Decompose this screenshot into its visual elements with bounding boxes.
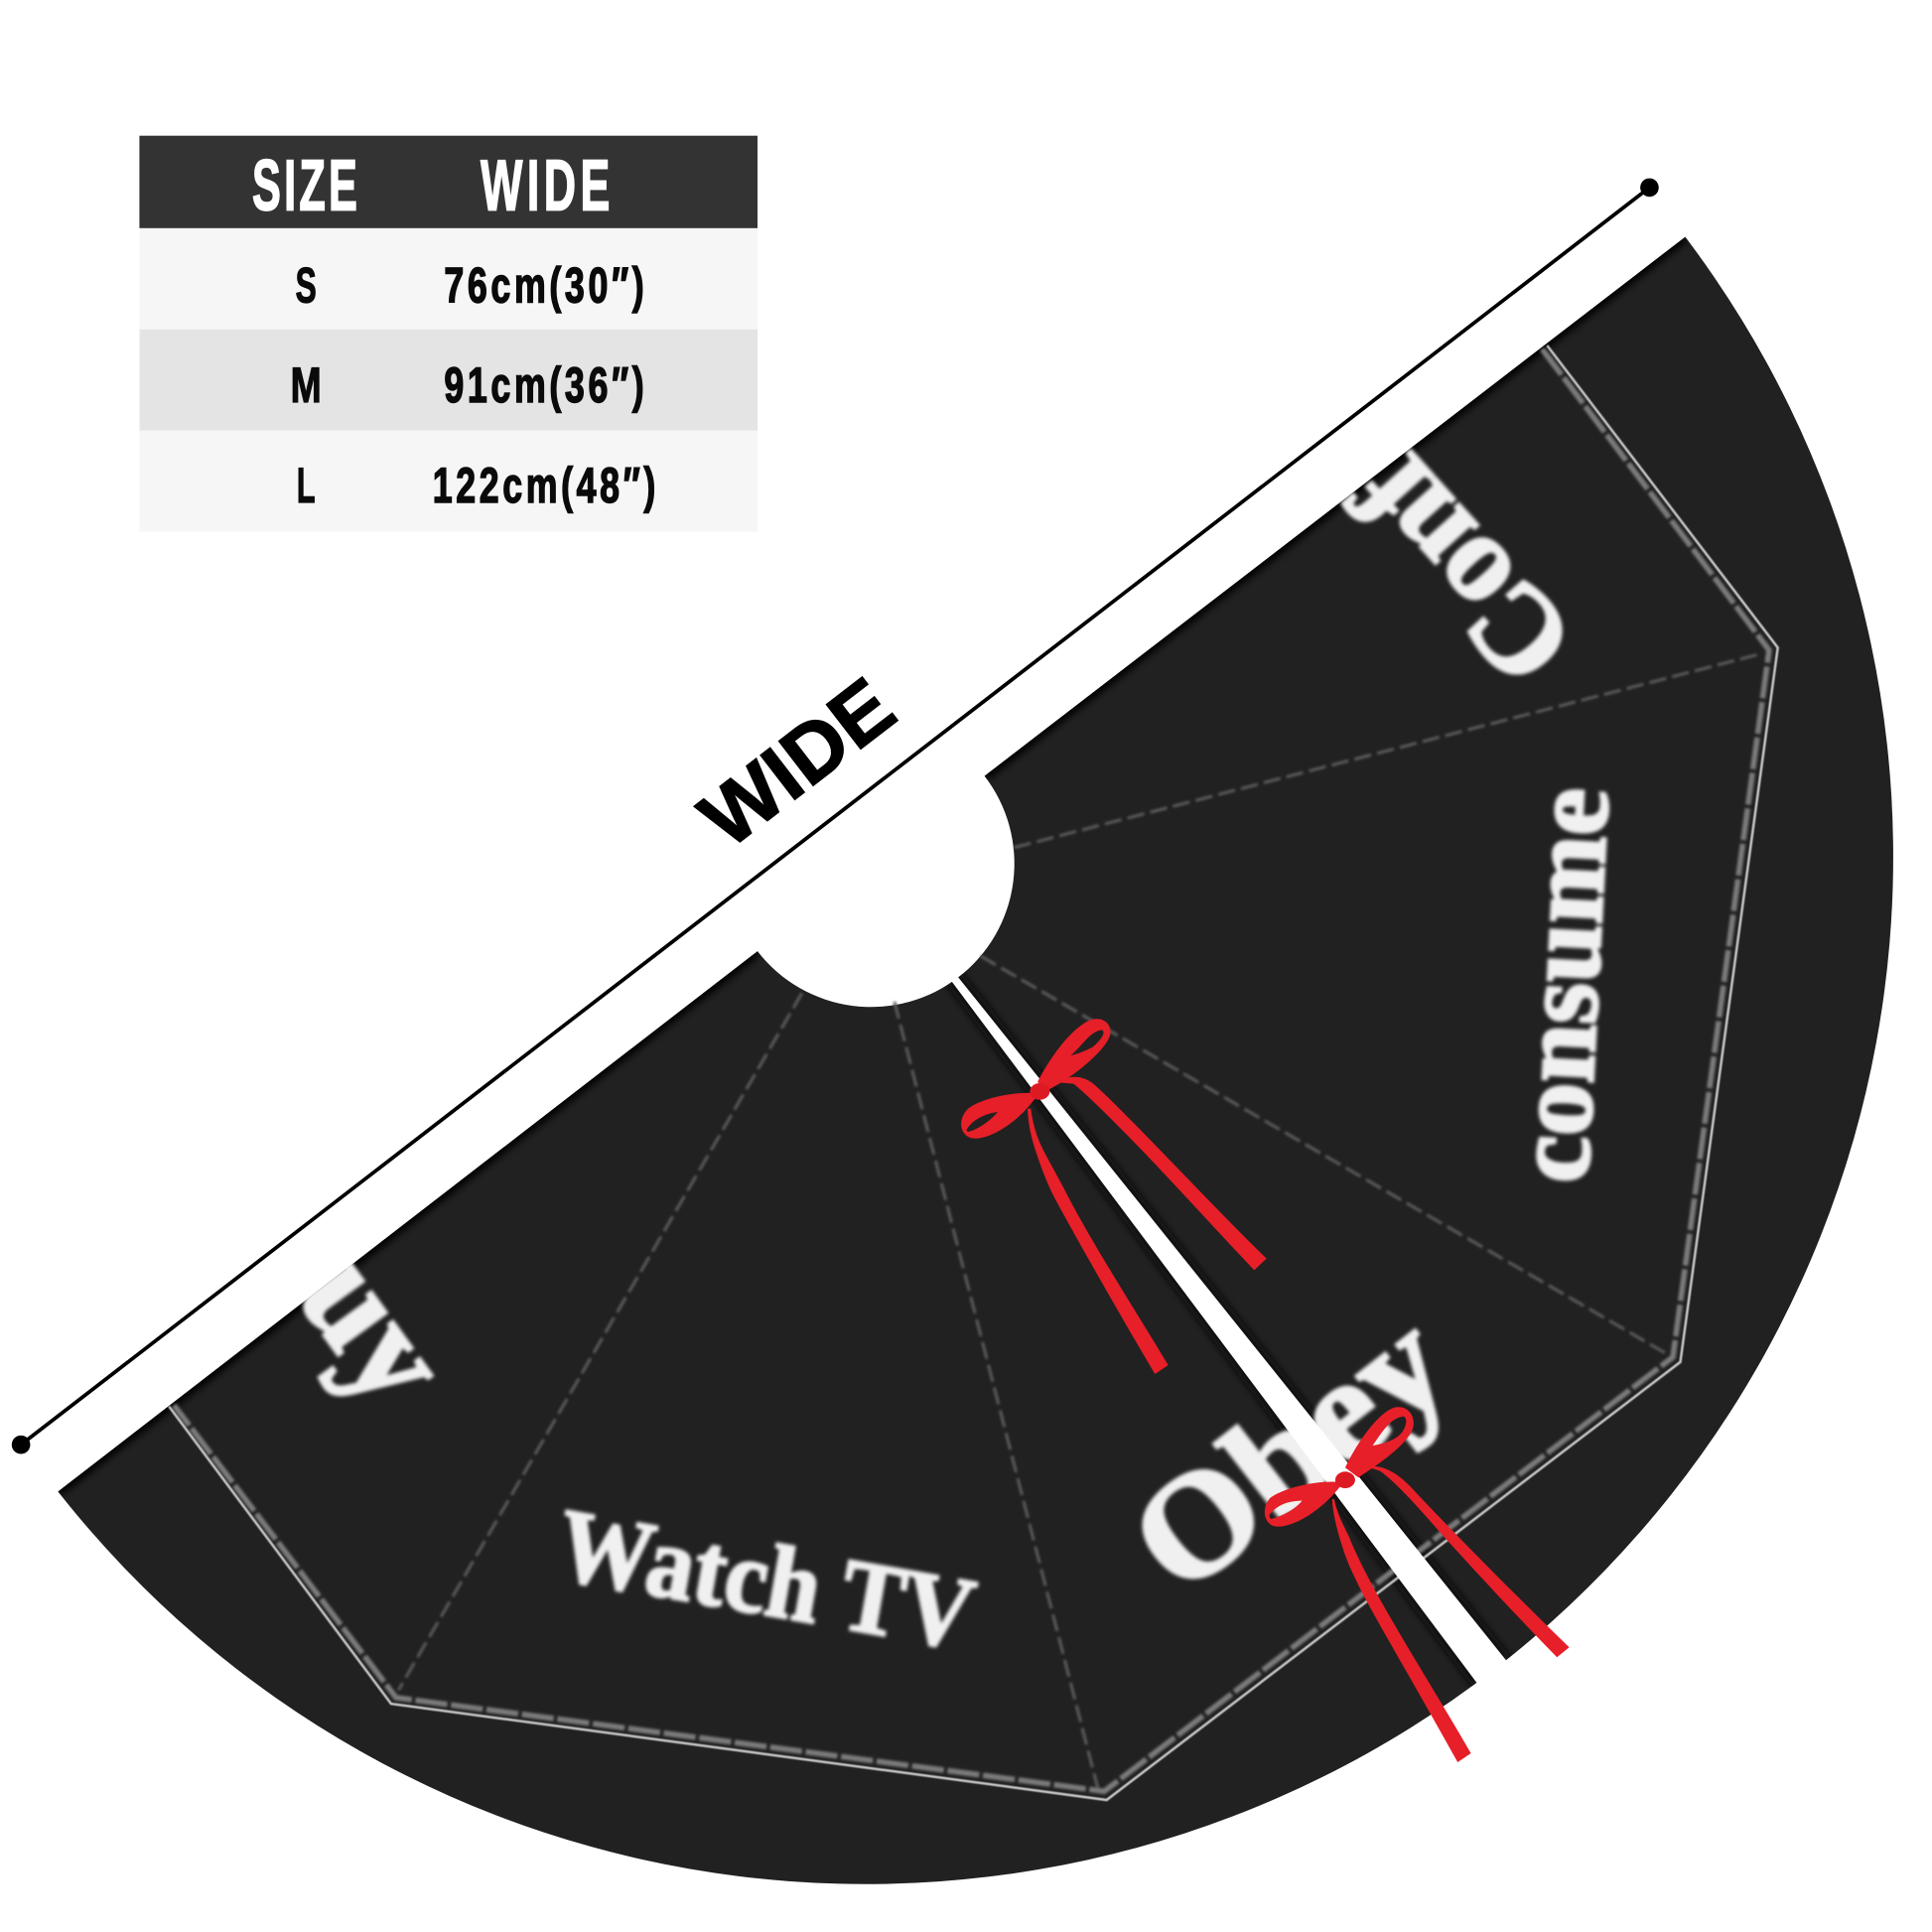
red ribbon bow upper xyxy=(961,1019,1267,1374)
row M: M xyxy=(291,357,322,413)
size table xyxy=(139,136,758,532)
row S xyxy=(139,228,758,330)
row S: S xyxy=(296,257,317,313)
word: Obey: Obey xyxy=(1100,1280,1477,1623)
word: Buy: Buy xyxy=(216,1150,480,1432)
row L: L xyxy=(297,458,315,513)
row L xyxy=(139,431,758,532)
word: Watch TV: Watch TV xyxy=(549,1486,983,1673)
row S: 76cm(30″) xyxy=(444,259,644,314)
word: consume: consume xyxy=(1491,784,1632,1185)
red ribbon bow lower xyxy=(1265,1407,1570,1762)
table header: SIZE xyxy=(252,145,357,225)
row L: 122cm(48″) xyxy=(433,459,655,513)
word: Conform: Conform xyxy=(1182,270,1599,712)
table header: WIDE xyxy=(481,145,610,225)
row M: 91cm(36″) xyxy=(444,358,644,414)
dimension label WIDE: WIDE xyxy=(684,661,911,865)
row M xyxy=(139,330,758,431)
dimension line: wide xyxy=(12,179,1659,1453)
polygon hem seam xyxy=(169,345,1778,1800)
radial dashed seams xyxy=(398,654,1760,1789)
slit opening xyxy=(951,975,1542,1727)
table header xyxy=(139,136,758,228)
skirt words xyxy=(216,270,1632,1673)
